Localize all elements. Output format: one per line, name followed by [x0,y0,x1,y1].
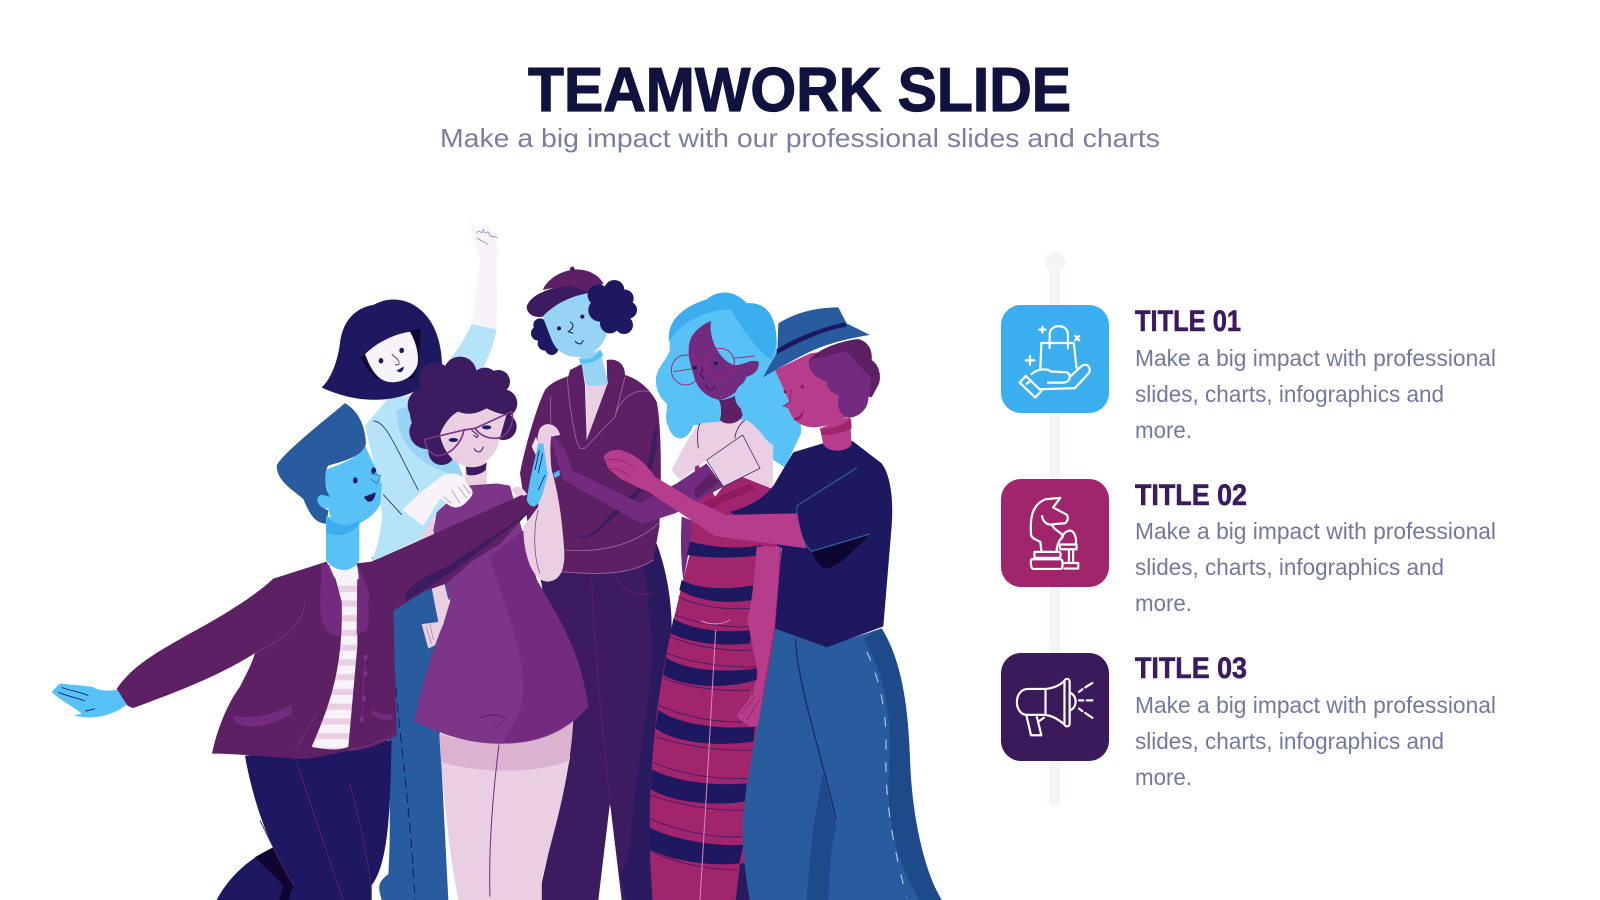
item 3 text: more. [1135,764,1192,790]
person: woman with blue hair and striped dress [649,293,801,900]
item 3 text: slides, charts, infographics and [1135,728,1444,754]
item 1 title: TITLE 01 [1135,305,1241,338]
item 2 title: TITLE 02 [1135,479,1247,512]
item 2 text: more. [1135,590,1192,616]
item 2 text [1135,518,1496,616]
item 1 text: Make a big impact with professional [1135,345,1496,371]
dress with navy stripes [649,465,783,900]
person: smiling man in maroon jacket [52,403,548,900]
item 3 text [1135,692,1496,790]
person: sleeve of raven-haired woman resting on friend's shoulder [402,473,473,526]
item 2 [1001,479,1496,616]
person: man in maroon hoodie and cap [520,267,672,900]
illustration: team of six people [52,216,942,900]
timeline rail with top dot [1045,252,1065,805]
item 3 text: Make a big impact with professional [1135,692,1496,718]
person: man in blue hat and navy t-shirt [603,307,942,900]
item 2 text: Make a big impact with professional [1135,518,1496,544]
raised pale arm [512,424,564,582]
item 2 text: slides, charts, infographics and [1135,554,1444,580]
person: curly-haired woman in purple dress [408,357,588,900]
item 3 title: TITLE 03 [1135,652,1247,685]
subtitle: Make a big impact with our professional slides and charts [440,123,1160,153]
item 1 text: slides, charts, infographics and [1135,381,1444,407]
title: TEAMWORK SLIDE [528,56,1071,125]
icon tile: chess knight and pawn [1001,479,1109,587]
item 3 [1001,652,1496,790]
person: woman with dark bob and raised arm [322,216,498,900]
item 1 [1001,305,1496,443]
person: arm of blue-haired woman reaching across [551,437,723,524]
icon tile: hand holding shopping bag [1001,305,1109,413]
item 1 text [1135,345,1496,443]
icon tile: megaphone [1001,653,1109,761]
item 1 text: more. [1135,417,1192,443]
curly hair [408,357,517,465]
